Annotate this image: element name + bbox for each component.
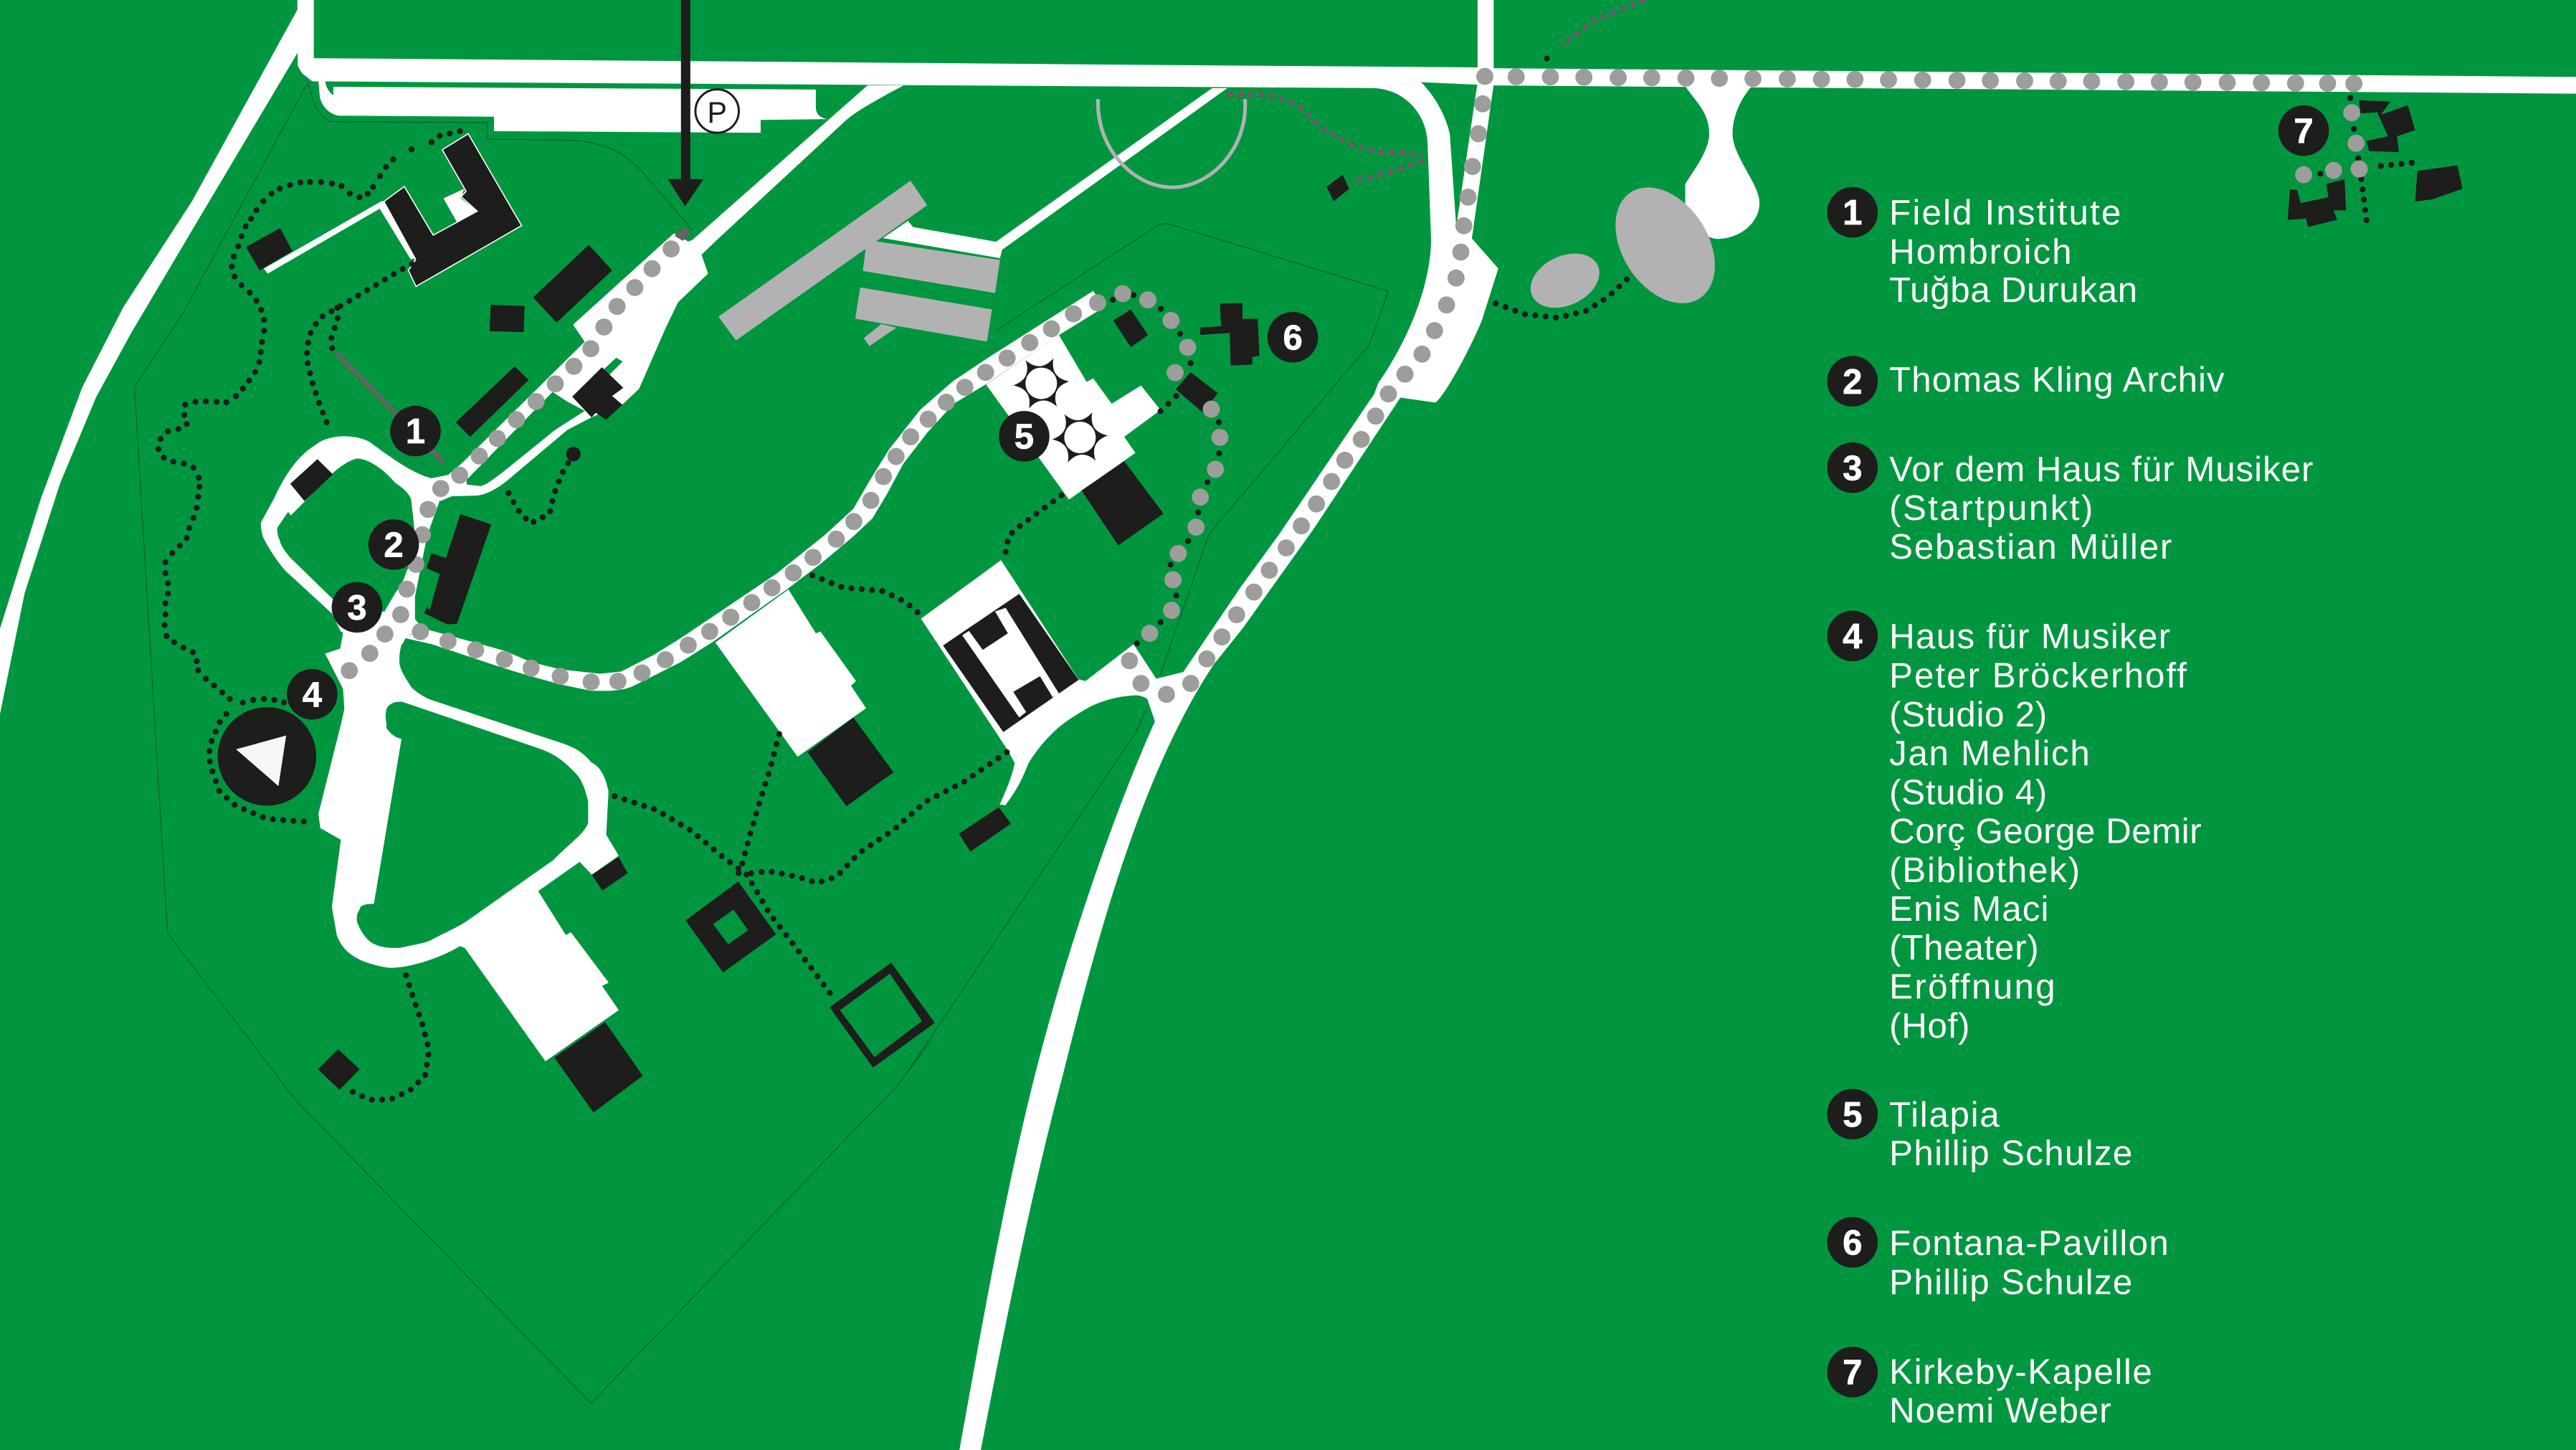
parking symbol (695, 90, 738, 133)
gray buildings (718, 169, 1736, 346)
lower road (959, 664, 1214, 1450)
legend item 2 (1828, 356, 2225, 407)
dotted walking paths (209, 59, 2420, 1099)
legend item 4: Corç George Demir (1889, 812, 2202, 851)
legend item 7: Kirkeby-Kapelle (1889, 1352, 2152, 1391)
east path from main road (1456, 82, 1494, 240)
loop road (261, 436, 440, 644)
legend item 4: Jan Mehlich (1889, 734, 2090, 773)
map badge 6: 6 (1283, 318, 1303, 357)
map badge 5 (999, 411, 1050, 462)
white road to arc (883, 88, 1227, 258)
north plaza and branch road (432, 85, 903, 501)
filled square with courtyard (685, 881, 776, 972)
legend item 3: Sebastian Müller (1889, 527, 2172, 567)
legend item 5: Tilapia (1889, 1095, 2000, 1134)
gray arc (1098, 99, 1245, 187)
legend item 3: (Startpunkt) (1889, 488, 2093, 528)
loop island (277, 458, 414, 621)
map badge 6 (1268, 312, 1318, 363)
south island (357, 701, 588, 948)
legend item 5 (1828, 1089, 2132, 1173)
map badge 4: 4 (303, 675, 323, 714)
legend item 7 (1828, 1347, 2152, 1431)
building: Field Institute (246, 134, 522, 286)
legend item 7: 7 (1843, 1353, 1863, 1393)
legend item 3: Vor dem Haus für Musiker (1889, 450, 2313, 489)
south road and plaza (318, 611, 619, 1061)
map badge 7: 7 (2294, 111, 2314, 151)
map badge 1: 1 (406, 412, 425, 451)
map badge 2: 2 (384, 526, 404, 565)
legend item 6: 6 (1843, 1223, 1863, 1263)
legend item 1 (1828, 187, 2137, 310)
legend item 2: 2 (1843, 362, 1863, 402)
building: H shaped house (943, 594, 1079, 732)
east road (1156, 82, 1498, 682)
main road along the top (298, 0, 2576, 94)
legend item 1: Tuğba Durukan (1889, 270, 2137, 310)
legend item 7: Noemi Weber (1889, 1391, 2111, 1431)
legend item 4: (Bibliothek) (1889, 850, 2080, 890)
legend (1828, 187, 2313, 1431)
star plaza (986, 335, 1161, 500)
legend item 1: Hombroich (1889, 232, 2072, 271)
long curved path (405, 291, 1104, 691)
legend item 1: 1 (1843, 193, 1863, 232)
Kirkeby chapel buildings (2288, 100, 2463, 227)
gray line from Field Institute (336, 354, 443, 463)
left road (0, 5, 309, 714)
legend item 4: Peter Bröckerhoff (1889, 656, 2187, 696)
black buildings (246, 100, 2463, 1112)
icon: star-shaped rooms (1012, 357, 1110, 463)
legend item 4: 4 (1843, 617, 1863, 656)
map badge 7 (2278, 105, 2329, 156)
legend item 4 (1828, 611, 2202, 1046)
map badge 2 (369, 519, 419, 570)
legend item 4: (Theater) (1889, 928, 2039, 967)
legend item 4: (Studio 2) (1889, 695, 2047, 734)
legend item 4: Haus für Musiker (1889, 617, 2170, 656)
legend item 2: Thomas Kling Archiv (1889, 360, 2225, 399)
map badge 4 (287, 669, 338, 719)
map badge 5: 5 (1014, 417, 1034, 457)
far-left walking path dots (158, 149, 412, 703)
hollow square (830, 962, 935, 1068)
legend item 3: 3 (1843, 448, 1863, 488)
parking strip (318, 79, 828, 133)
gray dotted route (349, 77, 2359, 694)
arrow: entrance (667, 0, 703, 207)
green sliver beside strip (467, 392, 585, 486)
legend item 6: Phillip Schulze (1889, 1262, 2132, 1302)
legend item 4: Eröffnung (1889, 967, 2055, 1007)
H plaza (921, 560, 1156, 805)
start marker with direction triangle (218, 707, 316, 806)
legend item 5: Phillip Schulze (1889, 1134, 2132, 1173)
musician house white (716, 589, 866, 757)
small dark dots on the gray route (1113, 98, 2358, 643)
legend item 3 (1828, 442, 2313, 567)
purple dotted paths (1227, 0, 1645, 181)
legend item 4: (Studio 4) (1889, 772, 2047, 812)
map badge 1 (390, 406, 441, 456)
drop-shaped pond (1686, 86, 1759, 239)
legend item 6 (1828, 1217, 2169, 1302)
legend item 4: Enis Maci (1889, 889, 2048, 929)
map badge 3 (332, 582, 382, 632)
map badge 3: 3 (347, 588, 367, 627)
legend item 5: 5 (1843, 1095, 1863, 1134)
parking symbol: P (707, 96, 727, 129)
legend item 4: (Hof) (1889, 1006, 1969, 1046)
legend item 6: Fontana-Pavillon (1889, 1223, 2169, 1263)
legend item 1: Field Institute (1889, 193, 2121, 232)
